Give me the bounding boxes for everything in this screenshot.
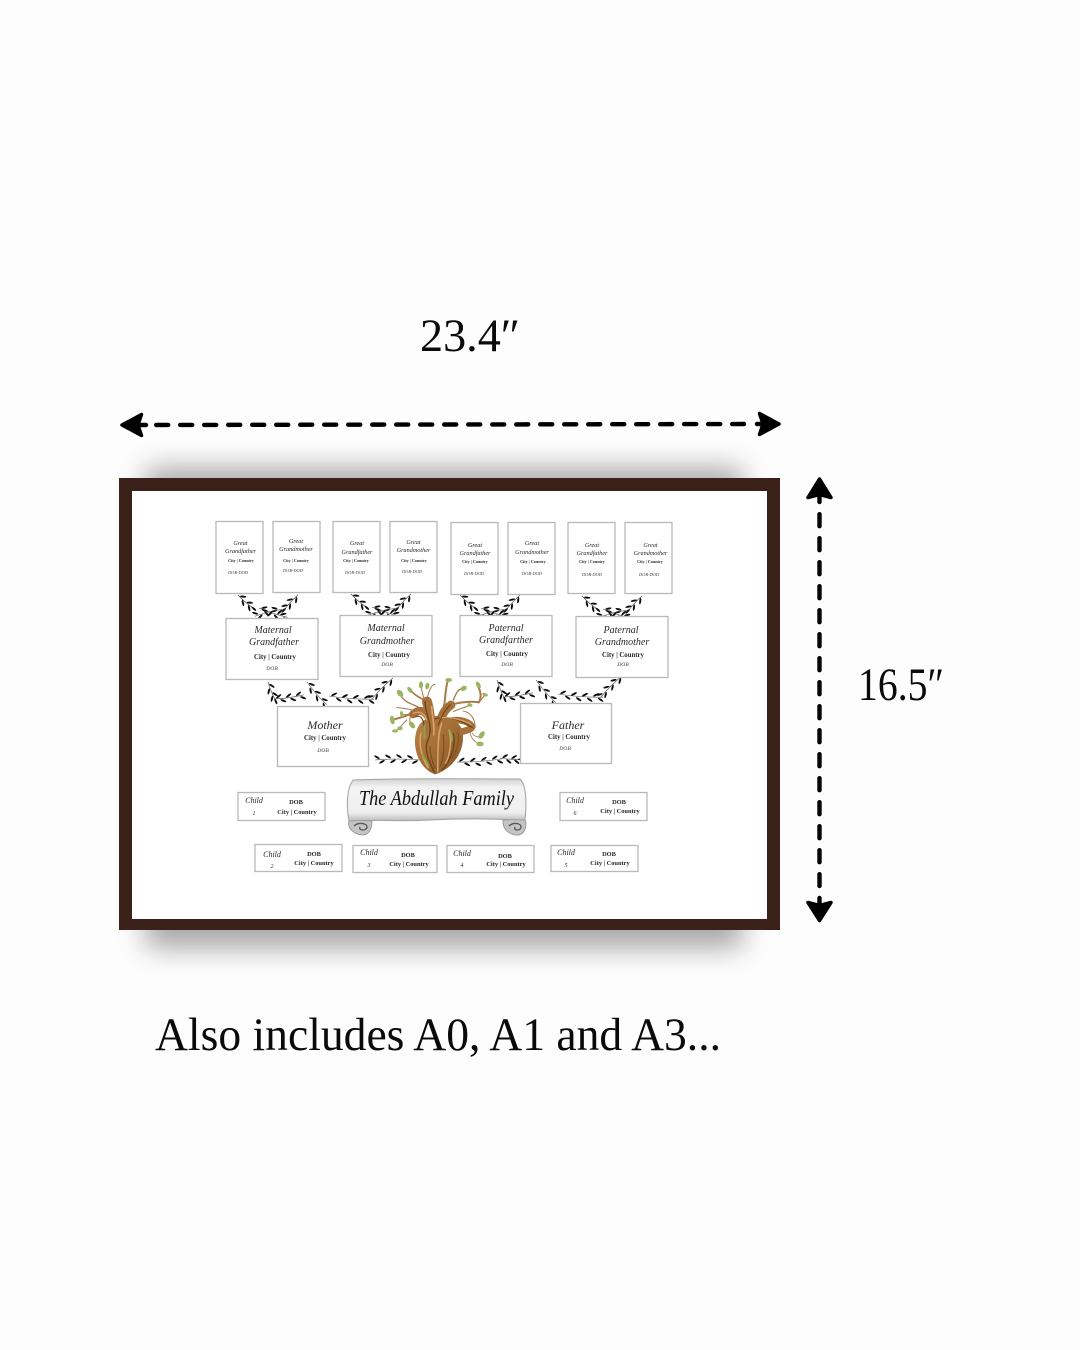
card: maternal grandfather (226, 618, 318, 680)
card: child 5 (551, 846, 638, 872)
scroll swirls (354, 823, 521, 830)
card: mother: City | Country (304, 735, 347, 742)
card: child 3 (353, 846, 437, 872)
card: great grandmother 4: Great (643, 542, 658, 549)
card: mother (278, 706, 368, 766)
print paper (132, 491, 767, 919)
card: child 4 (447, 846, 534, 872)
card: child 1: 1 (252, 811, 256, 817)
vine garland: grandparents to mother (263, 674, 396, 710)
card: paternal grandfather: City | Country (486, 651, 529, 658)
card: maternal grandmother (340, 616, 432, 676)
card: great grandmother 4: DOB-DOD (638, 572, 660, 577)
card: great grandfather 3 (451, 522, 498, 594)
card: great grandfather 3: City | Country (462, 559, 489, 564)
card: great grandfather 1 (216, 522, 263, 594)
arrow: horizontal width dimension (122, 414, 779, 436)
card: great grandmother 3: Great (525, 540, 539, 547)
card: great grandmother 3: Grandmother (515, 549, 549, 556)
parents row (278, 704, 612, 766)
card: great grandmother 3: DOB-DOD (521, 571, 543, 576)
card: great grandfather 3: DOB-DOD (463, 571, 485, 576)
card: child 1: Child (245, 796, 264, 805)
card: father: Father (551, 718, 585, 732)
title scroll banner (347, 779, 526, 835)
card: child 3: City | Country (389, 861, 429, 868)
vine garland: grandparents to father (492, 672, 625, 708)
heart branches (393, 681, 485, 744)
card: child 2 (255, 844, 342, 872)
card: maternal grandfather: City | Country (254, 654, 297, 661)
dimension label: height: 16.5″ (858, 659, 944, 711)
card: paternal grandfather: Grandfarther (479, 635, 533, 646)
card: child 5: City | Country (590, 860, 630, 867)
frame drop shadow (146, 468, 742, 948)
card: maternal grandfather: DOB (265, 666, 278, 672)
dimension label: width: 23.4″ (420, 310, 520, 362)
card: great grandfather 4 (568, 522, 615, 594)
framed family tree print (119, 478, 780, 930)
great grandparents row (216, 522, 672, 594)
card: great grandfather 2: Great (350, 540, 364, 547)
card: child 6 (560, 792, 647, 820)
card: great grandmother 1: Grandmother (279, 546, 313, 553)
card: great grandfather 2: City | Country (343, 558, 370, 563)
card: paternal grandmother (576, 616, 668, 678)
card: great grandfather 3: Great (468, 542, 482, 549)
card: child 5: Child (557, 848, 576, 857)
card: great grandmother 4: Grandmother (634, 550, 668, 557)
card: great grandmother 3 (508, 522, 555, 594)
card: paternal grandfather: Paternal (488, 623, 524, 634)
card: great grandfather 1: Grandfather (225, 548, 257, 555)
card: maternal grandmother: City | Country (368, 652, 411, 659)
card: paternal grandmother: Grandmother (595, 637, 649, 648)
card: child 2: City | Country (294, 860, 334, 867)
card: mother: Mother (306, 718, 343, 732)
card: child 1: DOB (289, 799, 304, 806)
card: great grandmother 4: City | Country (637, 559, 664, 564)
card: great grandfather 2: DOB-DOD (344, 570, 366, 575)
vines beside heart (374, 753, 524, 768)
card: paternal grandmother: Paternal (602, 625, 639, 636)
card: child 4: 4 (460, 862, 464, 869)
heart leaves (389, 678, 488, 746)
card: child 2: Child (263, 850, 282, 859)
card: great grandmother 4 (625, 522, 672, 594)
card: paternal grandfather (460, 616, 552, 676)
card: great grandfather 2 (333, 522, 380, 592)
card: maternal grandfather: Grandfather (249, 637, 299, 648)
children cards (238, 792, 647, 872)
card: maternal grandmother: Grandmother (360, 636, 414, 647)
card: great grandfather 4: Great (585, 542, 599, 549)
card: great grandfather 4: DOB-DOD (581, 572, 603, 577)
card: great grandmother 1 (273, 522, 320, 592)
card: child 4: DOB (498, 853, 513, 860)
card: child 3: Child (360, 848, 379, 857)
card: great grandmother 2: Grandmother (397, 547, 431, 554)
card: child 5: DOB (602, 851, 617, 858)
card: child 5: 5 (564, 863, 568, 869)
card: great grandfather 1: Great (233, 540, 248, 547)
card: father: DOB (558, 746, 571, 752)
grandparents row (226, 616, 668, 680)
card: child 3: DOB (401, 852, 416, 859)
card: paternal grandmother: City | Country (602, 652, 645, 659)
card: child 4: City | Country (486, 861, 526, 868)
card: great grandfather 4: Grandfather (577, 550, 608, 557)
card: great grandfather 1: DOB-DOD (227, 570, 249, 575)
card: maternal grandfather: Maternal (253, 625, 292, 636)
heart trunks (413, 702, 472, 732)
card: father: City | Country (548, 734, 591, 741)
card: great grandmother 1: DOB-DOD (282, 568, 304, 573)
card: child 6: Child (566, 796, 585, 805)
scroll body (347, 779, 526, 821)
card: great grandfather 4: City | Country (579, 559, 606, 564)
card: great grandmother 2: City | Country (401, 558, 428, 563)
scroll curls (349, 819, 526, 835)
card: great grandmother 2: DOB-DOD (401, 569, 423, 574)
frame (119, 478, 780, 930)
card: great grandmother 1: Great (289, 538, 303, 545)
illustration: tree heart (389, 678, 488, 774)
card: child 6: 6 (574, 811, 576, 817)
card: child 1 (238, 792, 325, 820)
card: great grandmother 3: City | Country (520, 559, 547, 564)
card: paternal grandfather: DOB (500, 662, 513, 668)
card: mother: DOB (316, 748, 329, 754)
card: paternal grandmother: DOB (616, 662, 629, 668)
caption: Also includes A0, A1 and A3... (155, 1009, 721, 1061)
family name: The Abdullah Family (359, 786, 515, 810)
card: child 2: DOB (307, 851, 322, 858)
card: child 4: Child (453, 849, 472, 858)
card: child 1: City | Country (277, 809, 317, 816)
card: child 3: 3 (366, 863, 370, 869)
card: maternal grandmother: Maternal (366, 623, 405, 634)
card: maternal grandmother: DOB (380, 662, 393, 668)
card: great grandfather 3: Grandfather (460, 550, 491, 557)
card: great grandmother 2: Great (406, 539, 421, 546)
heart body (415, 716, 463, 774)
vine garlands: great grandparents to grandparents (234, 590, 646, 624)
card: child 2: 2 (270, 864, 274, 870)
arrow: vertical height dimension (808, 479, 831, 920)
card: great grandmother 2 (390, 522, 437, 592)
card: great grandmother 1: City | Country (283, 558, 310, 563)
heart shading (413, 702, 472, 772)
card: great grandfather 2: Grandfather (342, 549, 373, 556)
card: child 6: DOB (612, 799, 627, 806)
card: father (520, 704, 612, 764)
card: child 6: City | Country (600, 808, 640, 815)
card: great grandfather 1: City | Country (228, 558, 255, 563)
